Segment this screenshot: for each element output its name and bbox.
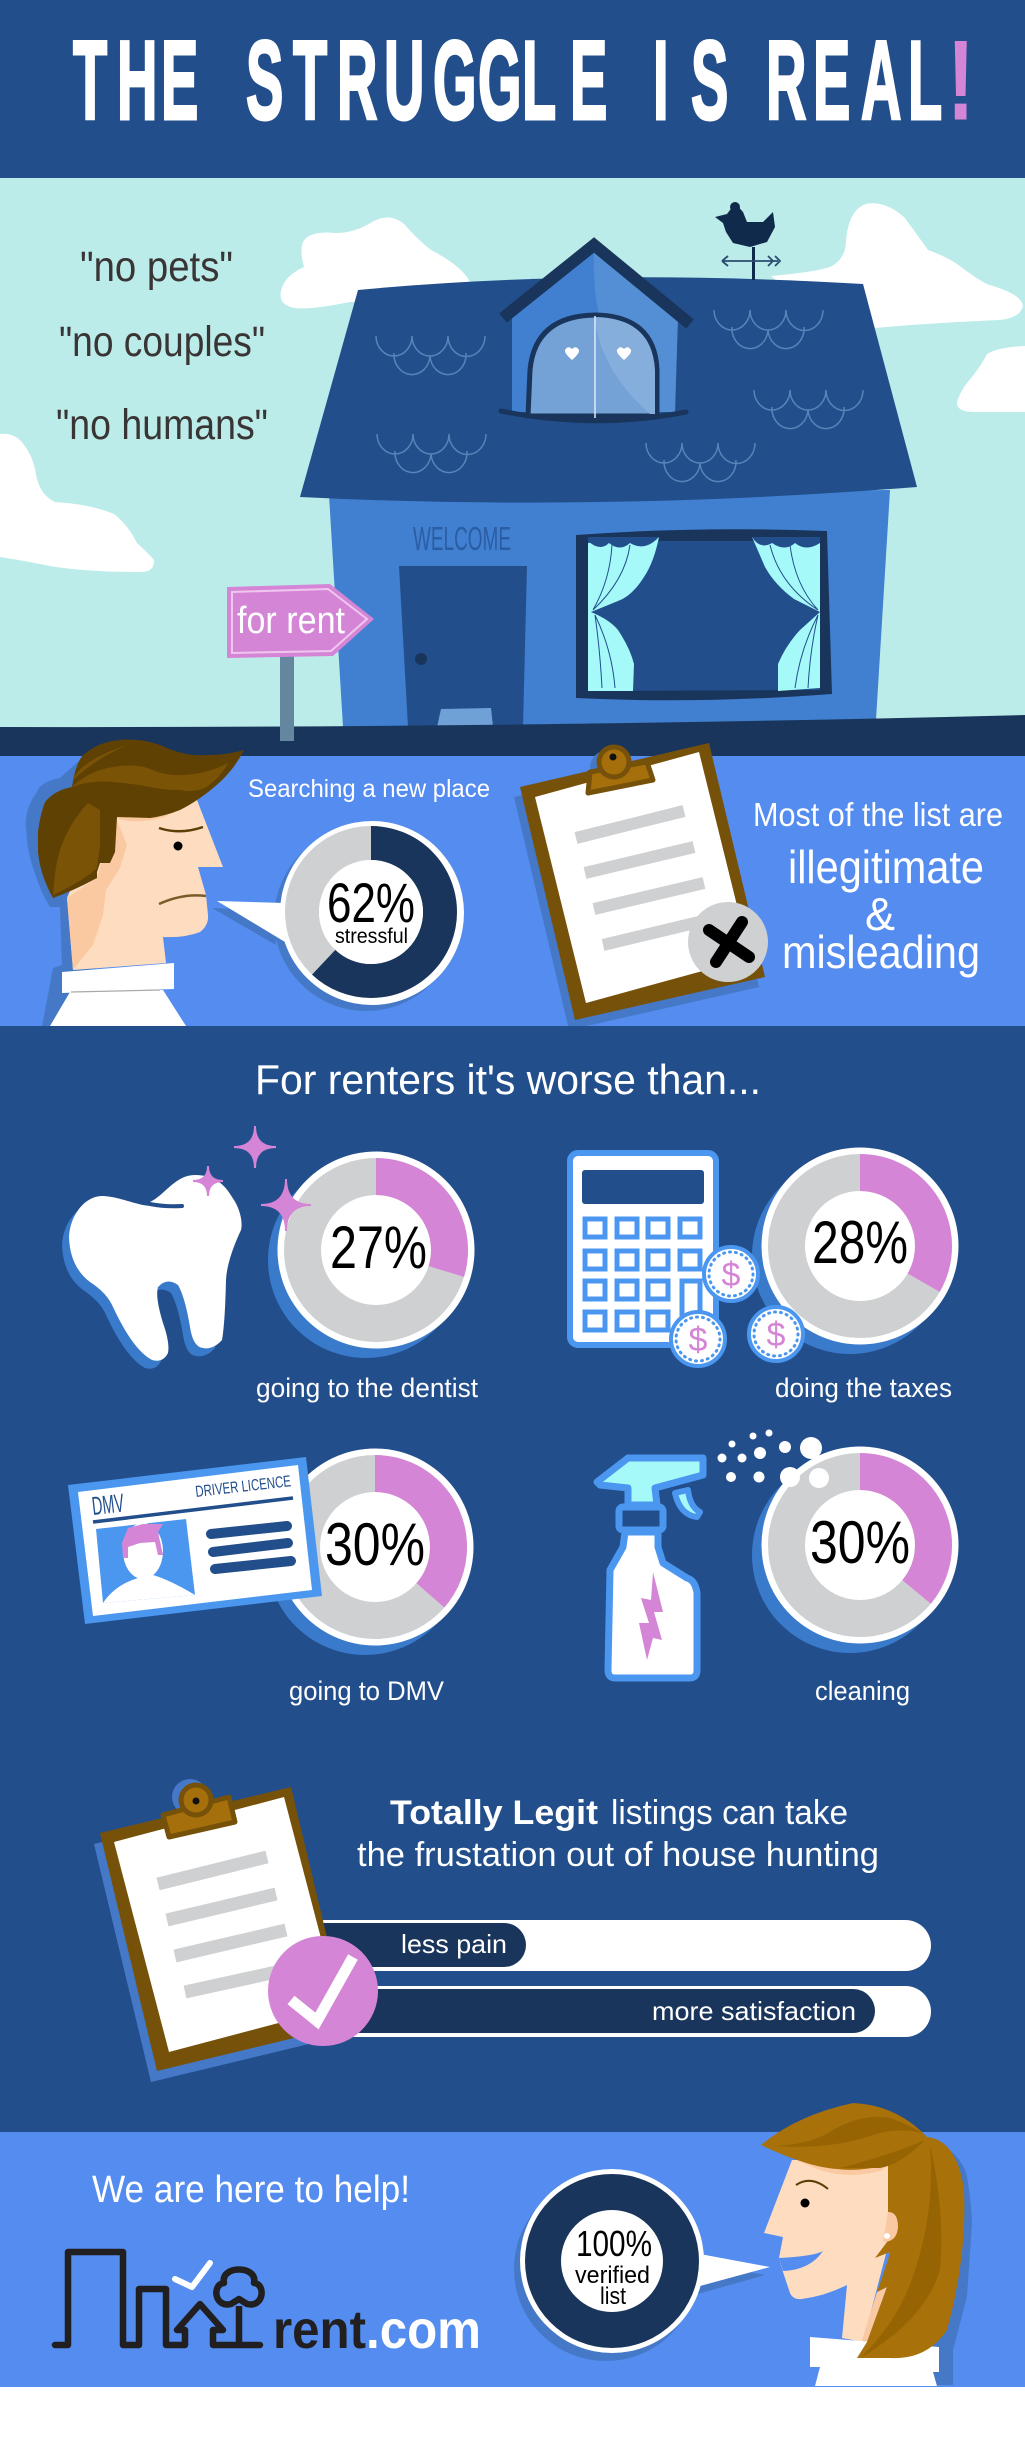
speech bubble donut: 62% stressful: stressful [335,925,408,948]
heading: for renters: For renters it's worse than... [255,1056,761,1103]
bar: more satisfaction [300,1986,931,2037]
title: THE [73,18,198,143]
text: totally legit: Totally Legit [390,1794,598,1832]
panel: worse than [0,1026,1025,2132]
quote: no couples: "no couples" [59,318,265,366]
text: we are here to help: We are here to help! [92,2169,410,2211]
cloud far left [0,434,154,572]
text: totally legit: the frustation out of house hunting [357,1836,879,1874]
icon: tooth with sparkles [62,1126,311,1369]
panel: house [300,202,917,727]
title: ! [948,18,974,143]
donut: 27% dentist [268,1152,474,1358]
text: most of the list: illegitimate [788,841,984,893]
donut: 28% taxes: 28% [812,1209,908,1276]
quote: no pets: "no pets" [80,243,233,291]
icon: driver licence card: DMV [90,1487,126,1521]
speech bubble: 100% verified list: verified [575,2262,650,2289]
coin [749,1307,803,1361]
cloud left of roof [281,217,470,308]
coin: $ [689,1321,708,1359]
clipboard with check [94,1779,378,2082]
white footer [0,2387,1025,2450]
text: totally legit: listings can take [611,1794,848,1832]
text: most of the list: Most of the list are [753,796,1003,833]
text: totally legit [357,1794,879,1874]
text: most of the list: & [865,888,895,940]
title: STRUGGLE [246,18,607,143]
clipboard with x [514,743,768,1030]
welcome sign text: WELCOME [413,520,511,557]
bar: more satisfaction: more satisfaction [652,1996,856,2026]
panel: searching stress [0,740,1025,1030]
coin: $ [767,1316,786,1354]
donut: 30% dmv [267,1448,474,1655]
speech bubble: 100% verified list: 100% [576,2223,652,2264]
bar: less pain [300,1920,931,1971]
icon: calculator with coins [570,1153,803,1366]
door [399,566,527,727]
text: most of the list [753,796,1003,978]
bar: less pain: less pain [401,1929,507,1959]
donut: 27% dentist: 27% [330,1214,427,1281]
coin [704,1247,758,1301]
speech bubble: 100% verified list: list [600,2283,626,2310]
for rent sign [227,584,374,741]
title [73,18,974,143]
cloud right of roof [771,203,1023,328]
panel: sky scene with house [0,178,1025,738]
donut: 30% cleaning [752,1446,958,1653]
icon: driver licence card: DRIVER LICENCE [195,1473,292,1501]
logo: rent.com [55,2252,481,2360]
donut: 28% taxes [752,1148,958,1354]
quote: no humans: "no humans" [56,401,268,449]
roof scale shingles [376,310,863,482]
label: dentist: going to the dentist [256,1373,478,1403]
roof [300,277,917,503]
speech bubble: 100% verified list [514,2169,770,2361]
icon: spray bottle [597,1430,829,1678]
man character [26,740,244,1026]
label: cleaning: cleaning [815,1676,910,1706]
coin [671,1312,725,1366]
house wall [329,490,890,727]
label: taxes: doing the taxes [775,1373,952,1403]
weathervane [715,202,780,280]
ground strip [0,715,1025,760]
label: dmv: going to DMV [289,1676,444,1706]
cloud far right [957,346,1025,412]
text: most of the list: misleading [782,926,980,978]
coin: $ [722,1256,741,1294]
logo: rent.com: rent [273,2300,366,2360]
title: REAL [766,18,942,143]
logo: rent.com: .com [366,2300,481,2360]
speech bubble donut: 62% stressful: 62% [327,871,415,934]
donut: 30% dmv: 30% [325,1511,425,1578]
panel: title header [0,0,1025,178]
icon: driver licence card [68,1457,322,1624]
woman character [761,2103,972,2386]
title: IS [653,18,728,143]
donut: 30% cleaning: 30% [810,1509,910,1576]
window with curtains [576,529,832,700]
panel: help footer [0,2103,1025,2387]
dormer [501,245,690,421]
text: searching a new place: Searching a new place [248,775,490,803]
for rent sign: for rent [237,600,345,642]
speech bubble donut: 62% stressful [212,821,464,1011]
